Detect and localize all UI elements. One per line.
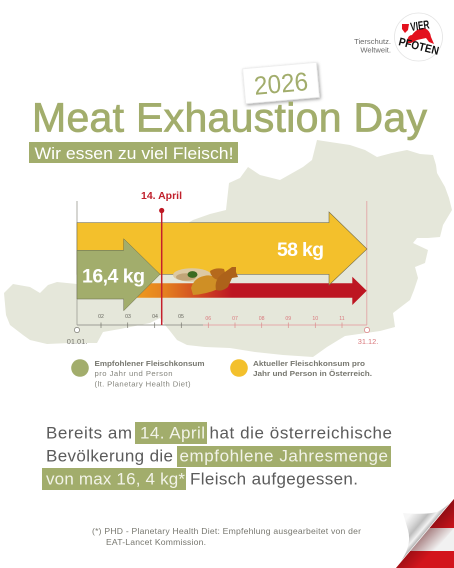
timeline axis: 02: [98, 314, 104, 320]
label 58 kg: 58 kg: [277, 239, 324, 261]
timeline axis: 03: [125, 314, 131, 320]
timeline axis: 01.01.: [67, 337, 87, 346]
logo tagline: Tierschutz.: [354, 37, 391, 46]
legend: actual consumption: Jahr und Person in Österreich.: [253, 369, 372, 378]
logo: Vier Pfoten: [394, 13, 442, 61]
year tag 2026: 2026: [253, 66, 309, 101]
arrow: actual consumption 58 kg: [77, 212, 367, 285]
chart: consumption timeline: [67, 191, 378, 346]
statement paragraph: Fleisch aufgegessen.: [190, 470, 358, 488]
year tag 2026: [243, 62, 319, 104]
logo: Vier Pfoten: VIER: [409, 17, 430, 34]
statement paragraph: Bereits am: [46, 424, 132, 442]
legend: recommended consumption: [71, 359, 205, 388]
arrow: red gradient: [137, 277, 367, 305]
timeline axis: 08: [259, 316, 265, 322]
legend: actual consumption: Aktueller Fleischkonsum pro: [253, 359, 365, 368]
map of Austria background: [4, 140, 452, 357]
marker line 14 April: 14. April: [141, 191, 182, 202]
title: Meat Exhaustion Day: [32, 94, 428, 140]
timeline axis: 11: [339, 316, 345, 322]
logo tagline: [354, 37, 391, 54]
footnote: [92, 526, 361, 547]
timeline axis: 10: [312, 316, 318, 322]
timeline axis: 09: [285, 316, 291, 322]
legend: recommended consumption: Empfohlener Fleischkonsum: [94, 359, 205, 368]
legend: recommended consumption: pro Jahr und Person: [94, 369, 172, 378]
arrow: recommended consumption 16,4 kg: [77, 239, 160, 311]
statement paragraph: hat die österreichische: [210, 424, 392, 442]
marker line 14 April: [141, 191, 182, 325]
timeline axis: 07: [232, 316, 238, 322]
timeline axis: 31.12.: [358, 337, 378, 346]
legend: recommended consumption: (lt. Planetary Health Diet): [94, 380, 191, 388]
timeline axis: [67, 201, 378, 346]
timeline axis: 05: [178, 314, 184, 320]
footnote: (*) PHD - Planetary Health Diet: Empfehlung ausgearbeitet von der: [92, 526, 361, 536]
statement paragraph: 14. April: [140, 424, 205, 442]
food: plate and chicken: [173, 267, 238, 295]
legend: actual consumption: [230, 359, 372, 378]
page curl with Austrian flag: [396, 499, 454, 568]
subtitle banner: Wir essen zu viel Fleisch!: [34, 144, 234, 163]
footnote: EAT-Lancet Kommission.: [106, 537, 206, 547]
statement paragraph: empfohlene Jahresmenge: [180, 446, 388, 466]
logo: Vier Pfoten: PFOTEN: [397, 36, 440, 58]
statement paragraph: [42, 422, 392, 490]
label 16,4 kg: 16,4 kg: [82, 266, 145, 288]
statement paragraph: Bevölkerung die: [46, 446, 173, 466]
logo tagline: Weltweit.: [360, 46, 391, 54]
timeline axis: 06: [205, 316, 211, 322]
timeline axis: 04: [152, 314, 158, 320]
statement paragraph: von max 16, 4 kg*: [46, 470, 185, 488]
